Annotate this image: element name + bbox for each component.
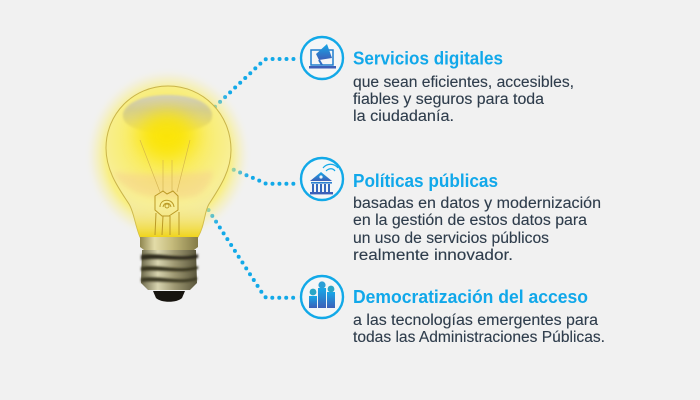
metal collar xyxy=(140,237,198,250)
screw thread xyxy=(141,250,198,290)
bulb glow xyxy=(84,67,252,243)
description: a las tecnologías emergentes para xyxy=(353,312,598,329)
description xyxy=(353,312,605,346)
icon: megaphone on laptop xyxy=(301,37,343,79)
filament wires xyxy=(140,140,190,192)
description: basadas en datos y modernización xyxy=(353,195,601,212)
dotted connector: servicios digitales xyxy=(215,59,296,107)
icon: three podium figures xyxy=(301,276,343,318)
dotted connector: políticas públicas xyxy=(234,170,296,184)
description: la ciudadanía. xyxy=(353,108,454,125)
glass bulb xyxy=(106,86,231,237)
description: un uso de servicios públicos xyxy=(353,230,549,247)
heading: Servicios digitales xyxy=(353,48,503,68)
light bulb illustration xyxy=(84,67,252,302)
black contact tip xyxy=(153,291,185,302)
lower neck tint xyxy=(129,204,209,237)
glass stem xyxy=(155,191,179,235)
description: realmente innovador. xyxy=(353,247,513,264)
description: fiables y seguros para toda xyxy=(353,91,544,108)
dotted connector: democratización xyxy=(208,210,296,298)
icon: government building with wifi xyxy=(301,158,343,200)
top reflection xyxy=(123,95,212,134)
heading: Democratización del acceso xyxy=(353,287,588,307)
description: todas las Administraciones Públicas. xyxy=(353,329,605,346)
item: políticas públicas xyxy=(301,158,601,264)
item: servicios digitales xyxy=(301,37,574,125)
heading: Políticas públicas xyxy=(353,171,498,191)
description xyxy=(353,195,601,264)
peach reflection xyxy=(113,171,213,198)
description: en la gestión de estos datos para xyxy=(353,212,587,229)
description xyxy=(353,74,574,125)
description: que sean eficientes, accesibles, xyxy=(353,74,574,91)
hot centre xyxy=(139,111,195,159)
item: democratización del acceso xyxy=(301,276,605,346)
